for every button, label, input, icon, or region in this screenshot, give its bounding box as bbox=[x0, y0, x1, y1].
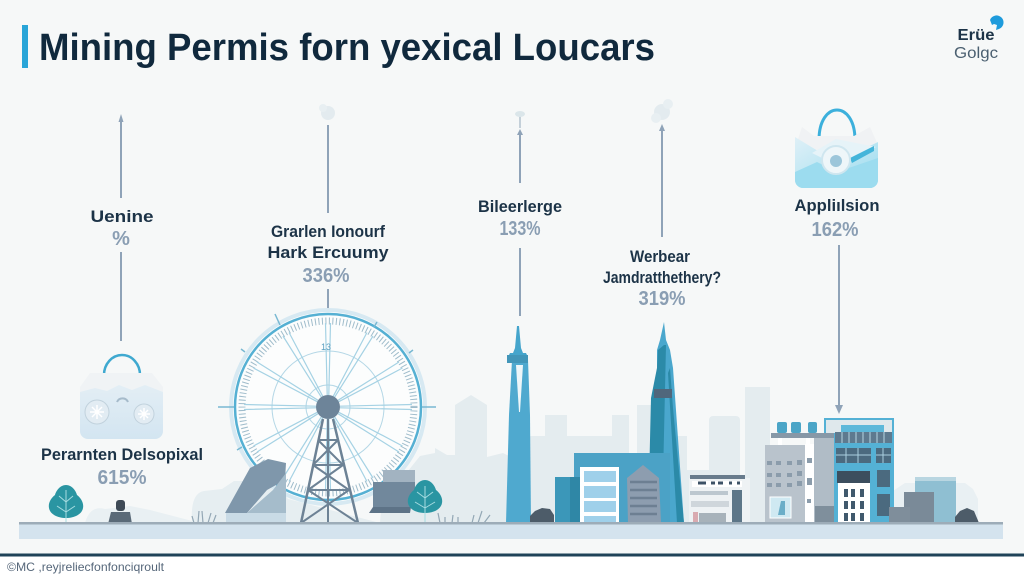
label: Werbear bbox=[603, 247, 721, 310]
label: Bileerlerge bbox=[478, 197, 562, 240]
label: Uenine: Uenine bbox=[90, 207, 154, 226]
title: Mining Permis forn yexical Loucars bbox=[39, 27, 655, 69]
ground bbox=[19, 522, 1003, 539]
label: Werbear: 319% bbox=[638, 288, 686, 310]
building: low white bbox=[689, 475, 750, 523]
background skyline bbox=[85, 387, 978, 525]
arrow: column 5 bbox=[835, 245, 843, 414]
label: Grarlen Ionourf: Grarlen Ionourf bbox=[271, 222, 385, 241]
label: Bileerlerge: Bileerlerge bbox=[478, 197, 562, 216]
building: small grey and teal bbox=[889, 477, 956, 523]
label: Appliılsion bbox=[794, 196, 880, 241]
label: Grarlen Ionourf: Hark Ercuumy bbox=[268, 243, 389, 262]
arrow: column 4 bbox=[651, 99, 673, 237]
grass bbox=[192, 511, 490, 523]
logo: Golgc bbox=[954, 45, 998, 62]
label: Perarnten Delsopixal bbox=[41, 445, 203, 489]
tower: slim spire bbox=[506, 326, 531, 523]
arrow: column 3 bbox=[515, 111, 525, 316]
tower: dark blue skyscraper bbox=[648, 322, 684, 523]
label: Appliılsion: 162% bbox=[812, 219, 859, 241]
ferris wheel: 13 bbox=[321, 342, 331, 352]
icon: right bag bbox=[795, 110, 878, 188]
label: Werbear: Werbear bbox=[630, 247, 690, 266]
footer credit: ©MC ,reyjreliecfonfonciqroult bbox=[7, 560, 165, 574]
label: Appliılsion: Appliılsion bbox=[794, 196, 880, 215]
label: Perarnten Delsopixal: Perarnten Delsopixal bbox=[41, 445, 203, 464]
tree right bbox=[408, 480, 442, 524]
car left bbox=[530, 508, 554, 523]
building: blue block bbox=[555, 453, 670, 523]
label: Uenine bbox=[90, 207, 154, 250]
icon: left bag bbox=[80, 355, 163, 439]
label: Uenine: % bbox=[112, 228, 130, 250]
logo bbox=[954, 15, 1004, 62]
house left of tower bbox=[225, 459, 286, 523]
person bbox=[108, 500, 132, 524]
label: Werbear: Jamdratthethery? bbox=[603, 268, 721, 287]
label: Grarlen Ionourf bbox=[268, 222, 389, 287]
arrow: column 2 bbox=[319, 104, 335, 312]
tree left bbox=[49, 485, 83, 524]
building: blue offices bbox=[824, 418, 894, 523]
bottom rule bbox=[0, 554, 1024, 576]
arrow: column 1 bbox=[118, 114, 124, 341]
label: Grarlen Ionourf: 336% bbox=[302, 265, 350, 287]
ferris wheel bbox=[218, 310, 436, 523]
building: grey offices bbox=[765, 422, 836, 523]
label: Perarnten Delsopixal: 615% bbox=[98, 467, 147, 489]
tower lattice bbox=[301, 419, 358, 523]
logo: Erüe bbox=[958, 27, 995, 44]
car right bbox=[955, 508, 979, 523]
house right of tower bbox=[369, 470, 415, 513]
label: Bileerlerge: 133% bbox=[500, 218, 541, 240]
